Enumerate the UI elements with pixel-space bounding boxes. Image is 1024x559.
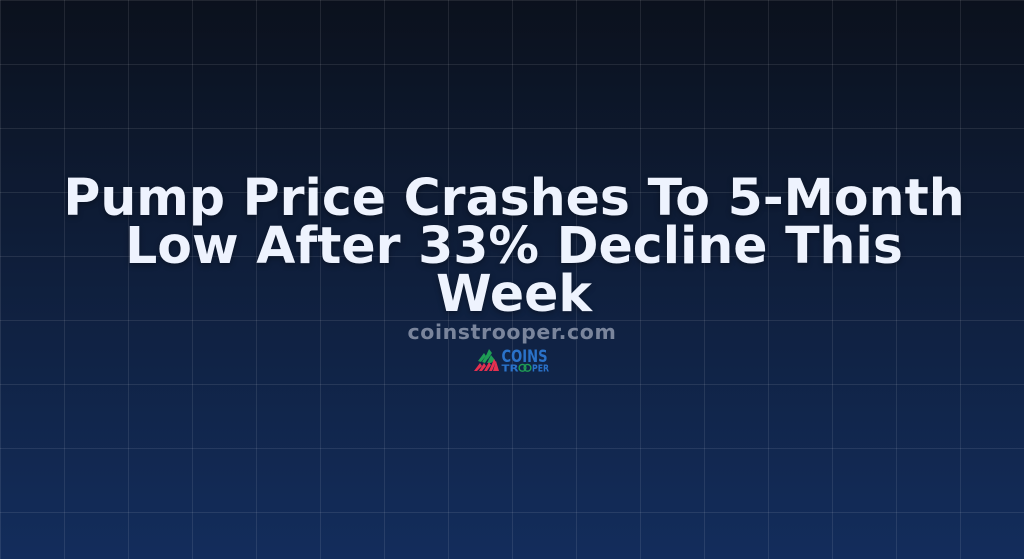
logo: Coins Trooper: [474, 347, 549, 374]
logo icon: green peaks: [478, 349, 495, 363]
title: [63, 168, 965, 323]
website label: coinstrooper.com: [408, 320, 616, 344]
title: Low After 33% Decline This: [125, 216, 903, 275]
logo icon: red peaks: [474, 359, 499, 371]
title: Week: [436, 264, 592, 323]
logo letters: green OO: [519, 364, 531, 371]
title: Pump Price Crashes To 5-Month: [63, 168, 965, 227]
logo word: TROOPER: [502, 364, 549, 374]
